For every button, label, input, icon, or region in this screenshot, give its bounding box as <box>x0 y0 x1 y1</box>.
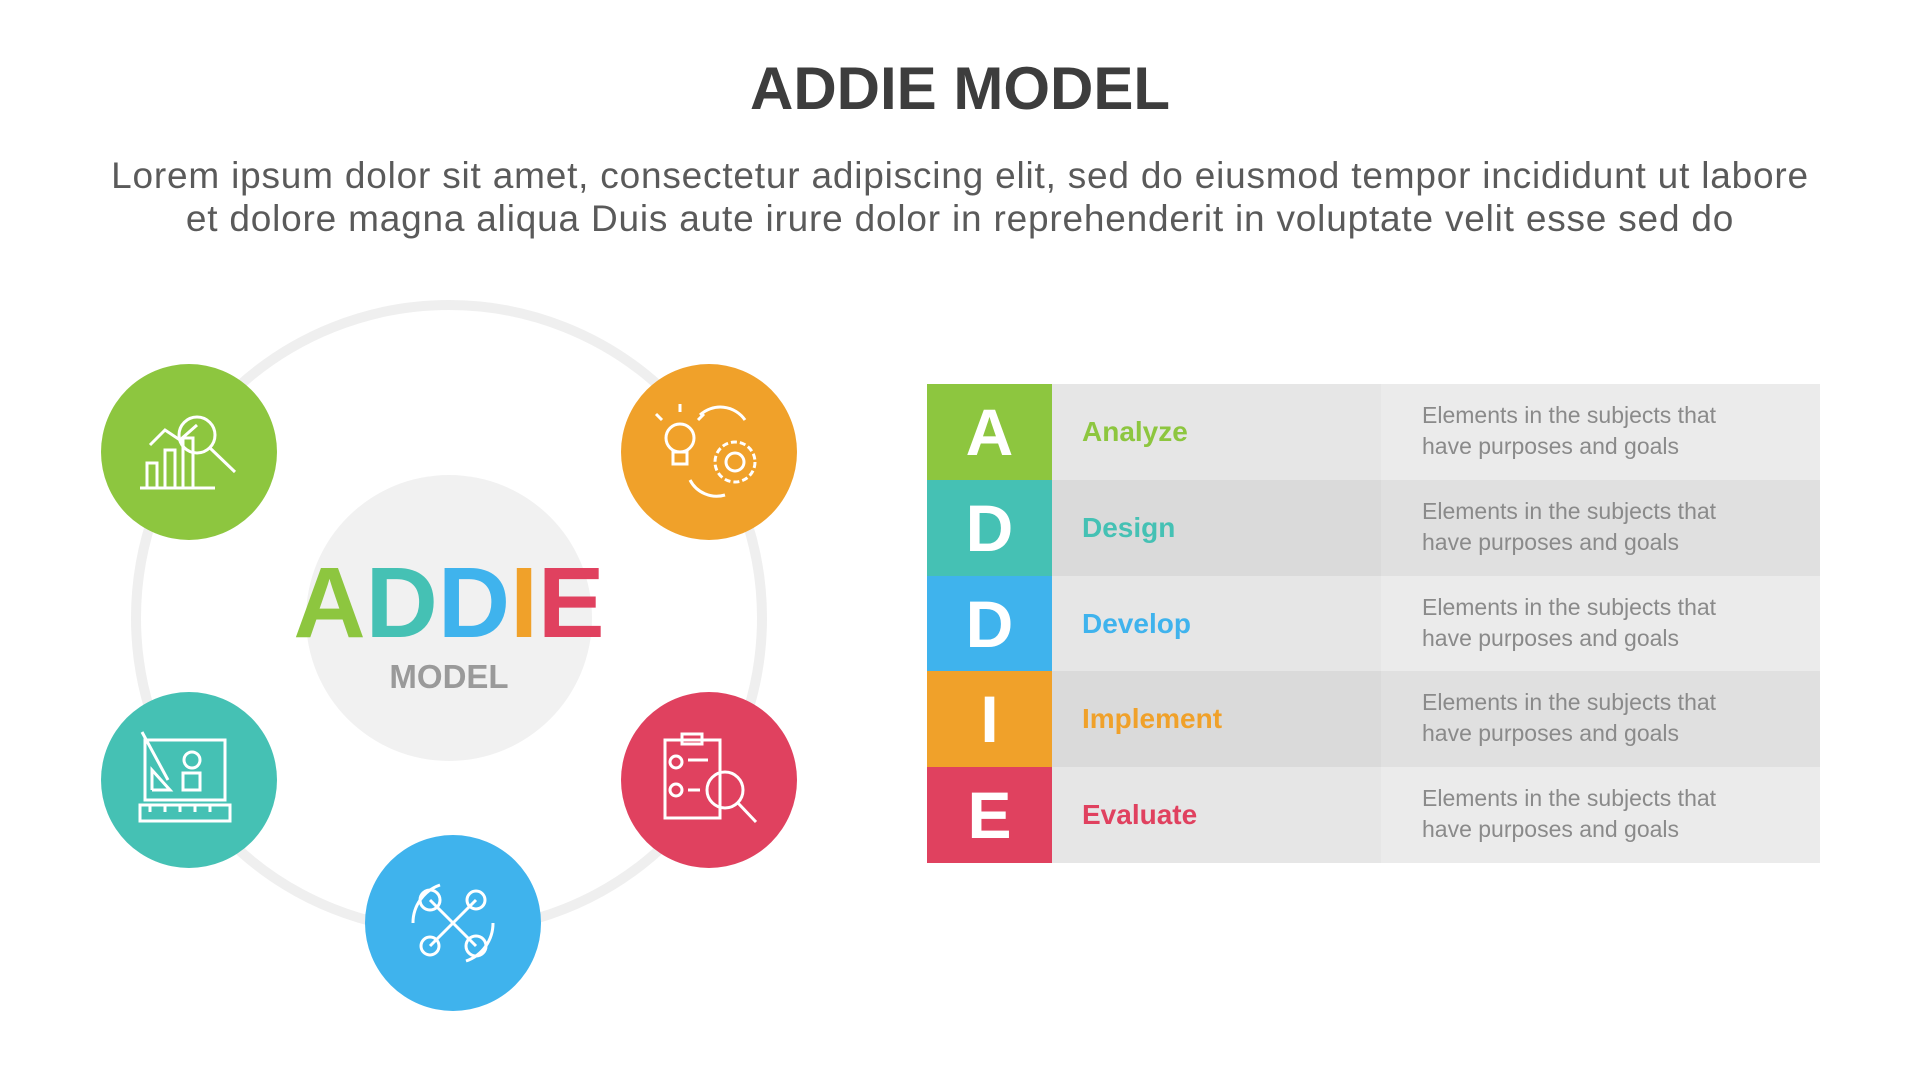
row: Implement: I <box>980 682 999 756</box>
row: Evaluate: E <box>967 778 1012 852</box>
row: Develop: D <box>966 587 1013 661</box>
row: Evaluate <box>927 767 1820 863</box>
icon: design blueprint <box>101 692 277 868</box>
icon: implement idea gear <box>621 364 797 540</box>
center circle: ADDIE <box>293 547 605 659</box>
row: Analyze <box>927 384 1820 480</box>
row: Develop <box>927 576 1820 671</box>
row: Evaluate: Evaluate <box>1082 799 1197 830</box>
row: Design: have purposes and goals <box>1422 529 1679 555</box>
title: ADDIE MODEL <box>750 55 1170 122</box>
row: Analyze: A <box>966 395 1013 469</box>
row: Design: D <box>966 491 1013 565</box>
row: Design <box>927 480 1820 576</box>
center circle: MODEL <box>389 658 509 695</box>
subtitle <box>111 155 1809 239</box>
center circle <box>293 475 605 761</box>
icon: evaluate checklist <box>621 692 797 868</box>
row: Design: Elements in the subjects that <box>1422 498 1716 524</box>
row: Design: Design <box>1082 512 1175 543</box>
icon: analyze chart <box>101 364 277 540</box>
row: Develop: Elements in the subjects that <box>1422 594 1716 620</box>
cycle diagram <box>101 300 797 1011</box>
row: Implement <box>927 671 1820 767</box>
row: Develop: have purposes and goals <box>1422 625 1679 651</box>
row: Implement: have purposes and goals <box>1422 720 1679 746</box>
row: Implement: Implement <box>1082 703 1222 734</box>
row: Implement: Elements in the subjects that <box>1422 689 1716 715</box>
row: Develop: Develop <box>1082 608 1191 639</box>
row: Evaluate: Elements in the subjects that <box>1422 785 1716 811</box>
subtitle: Lorem ipsum dolor sit amet, consectetur adipiscing elit, sed do eiusmod tempor incididunt ut labore <box>111 155 1809 196</box>
row: Evaluate: have purposes and goals <box>1422 816 1679 842</box>
subtitle: et dolore magna aliqua Duis aute irure dolor in reprehenderit in voluptate velit esse sed do <box>186 198 1734 239</box>
row: Analyze: have purposes and goals <box>1422 433 1679 459</box>
row: Analyze: Elements in the subjects that <box>1422 402 1716 428</box>
row: Analyze: Analyze <box>1082 416 1188 447</box>
icon: develop tools <box>365 835 541 1011</box>
